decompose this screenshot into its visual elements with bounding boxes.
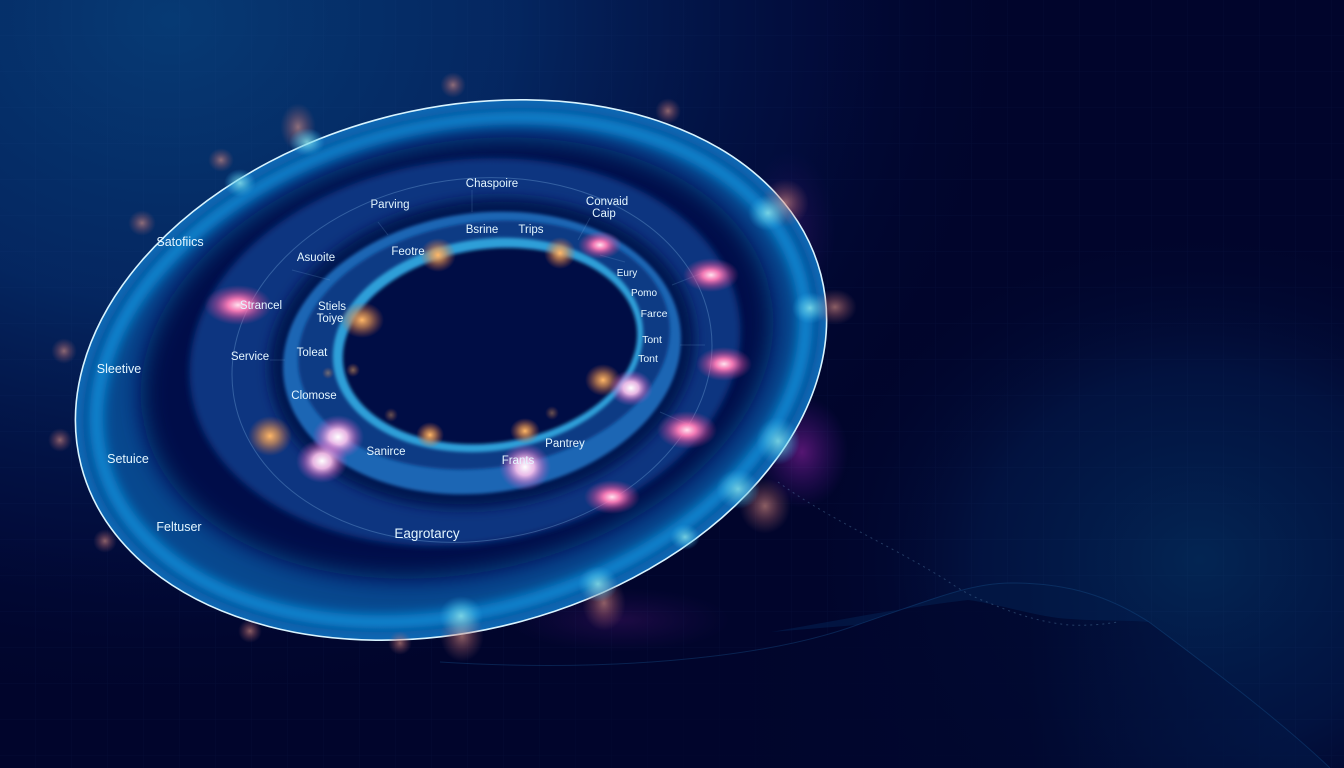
ring labels: middle ring: Strancel [240,300,282,312]
ring labels: inner ring: Stiels [318,301,346,313]
ring labels: inner ring: Pantrey [545,438,585,450]
ring labels: middle ring: Service [231,351,269,363]
ring labels: inner ring: Trips [518,224,544,236]
inner bands [264,187,700,519]
ring labels: middle ring [231,178,628,363]
inner ring [319,218,657,472]
ring labels: outer ring [97,235,460,541]
ring labels: outer ring: Eagrotarcy [394,526,460,541]
ring labels: outer ring: Setuice [107,452,149,466]
ring labels: middle ring: Parving [370,199,410,211]
ring labels: inner ring [291,224,668,467]
pink node glows [204,231,752,514]
ring labels: inner ring: Bsrine [466,224,498,236]
ring labels: outer ring: Sleetive [97,362,141,376]
cyan glows on rim [224,128,828,636]
ring labels: inner ring: Toiye [317,313,343,325]
ring labels: inner ring: Tont [638,353,658,365]
middle band [164,123,766,581]
ring labels: middle ring: Asuoite [297,252,335,264]
ring labels: inner ring: Eury [617,268,637,279]
dim glows outside the ring [48,72,857,662]
ring labels: inner ring: Tont [642,334,662,346]
outer ring [74,99,828,641]
ring labels: inner ring: Farce [641,308,668,320]
orange glows [248,237,621,456]
ring labels: inner ring: Clomose [291,390,337,402]
ring labels: middle ring: Caip [592,208,616,220]
ring labels: outer ring: Satofiics [156,235,204,249]
connector lines [270,190,705,425]
wave shape bottom right [440,482,1330,768]
ring labels: middle ring: Convaid [586,196,628,208]
ring labels: inner ring: Pomo [631,288,657,299]
outer glow around ring [510,150,848,652]
ring labels: inner ring: Toleat [297,347,328,359]
ring labels: inner ring: Frants [502,455,535,467]
ring labels: inner ring: Feotre [391,246,425,258]
ring labels: outer ring: Feltuser [156,520,202,534]
ring labels: middle ring: Chaspoire [466,178,518,190]
ring labels: inner ring: Sanirce [366,446,406,458]
